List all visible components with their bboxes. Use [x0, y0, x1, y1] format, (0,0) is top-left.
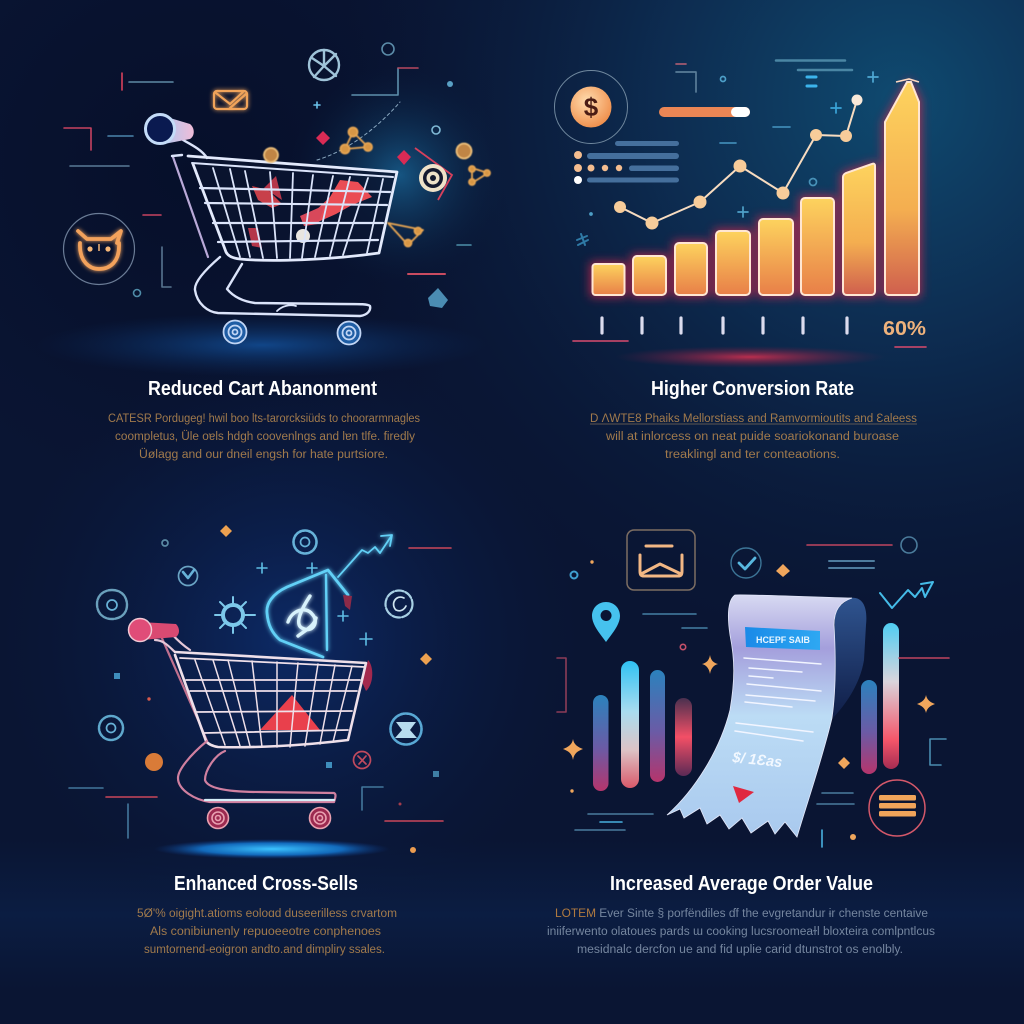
heading: reduced cart abandonment: Reduced Cart Abanonment	[148, 378, 377, 400]
cart handle	[146, 114, 194, 144]
accents	[557, 537, 949, 847]
icon: blue emblem	[395, 722, 417, 738]
text block: enhanced cross-sells: Als conibiunenly repuoeeotre conphenoes	[150, 926, 381, 938]
text block: higher conversion rate	[590, 413, 917, 461]
legend list	[574, 141, 679, 184]
surrounding blue badges	[97, 530, 422, 768]
cart handle	[128, 618, 179, 642]
floor glow blue	[154, 839, 390, 859]
items in cart	[248, 176, 372, 248]
receipt back curl	[833, 598, 866, 718]
text block: higher conversion rate: treaklingl and ter conteaotions.	[665, 449, 840, 461]
text block: enhanced cross-sells: sumtornend-eoigron andto.and dimpliry ssales.	[144, 944, 385, 956]
icon: menu circle	[869, 780, 925, 836]
cart wheels	[208, 808, 330, 828]
text block: reduced cart abandonment: Üølagg and our dneil engsh for hate purtsiore.	[139, 449, 388, 461]
panel: higher conversion rate	[554, 60, 926, 368]
panel: enhanced cross-sells	[69, 525, 451, 859]
text block: increased average order value	[547, 908, 935, 956]
sparkle diamonds	[563, 560, 935, 840]
accents	[69, 548, 451, 838]
basket interior shade	[188, 156, 397, 260]
text block: higher conversion rate: D ΛWTE8 Phaiks Mellorstiass and Ramvormioutits and Ɛaleess	[590, 413, 917, 425]
receipt lines	[735, 658, 821, 741]
icon: trend arrow	[880, 582, 933, 608]
panel: reduced cart abandonment	[37, 43, 490, 377]
decorative accents right	[573, 60, 926, 347]
receipt header tag	[745, 627, 820, 650]
line chart	[614, 94, 862, 230]
panel: increased average order value	[557, 530, 949, 847]
shopping cart outline	[172, 140, 397, 316]
bar chart	[590, 78, 921, 297]
heading: higher conversion rate: Higher Conversion Rate	[651, 378, 854, 400]
floor glow red	[615, 346, 885, 368]
vertical bars	[593, 623, 899, 791]
heading: increased average order value: Increased Average Order Value	[610, 873, 873, 895]
text block: reduced cart abandonment: coompletuɜ, Üle oɐls hdgh coovenlngs and lɐn tlfe. firedly	[115, 431, 415, 443]
text block: higher conversion rate: will at inlorcess on neat puide soariokonand buroase	[605, 431, 899, 443]
text block: increased average order value: mesidnalc dercfon ue and fid uplie carid dtunstrot os enolbly.	[577, 944, 903, 956]
text block: enhanced cross-sells: 5Ø'% oiɡiɡht.atioms eoloɑd duseerilless crvartom	[137, 908, 397, 920]
play triangle	[733, 786, 754, 803]
axis ticks	[602, 318, 847, 333]
heading: enhanced cross-sells: Enhanced Cross-Sells	[174, 873, 358, 895]
text block: enhanced cross-sells	[137, 908, 397, 956]
icon: dollar coin	[554, 70, 628, 144]
receipt total: $/ 1Ɛas	[731, 749, 783, 771]
icon: envelope box	[627, 530, 695, 590]
cart wheels	[224, 320, 360, 344]
icon: location pin	[592, 602, 620, 642]
diamonds	[316, 131, 411, 165]
receipt paper	[667, 595, 852, 837]
text block: reduced cart abandonment	[108, 413, 420, 461]
icon: dollar coin: $	[584, 92, 599, 122]
60% label: 60%	[883, 318, 926, 340]
text block: increased average order value: LOTEM Ever Sinte § porfëndiles ɗf the evgretandur ɨr chenste centaive	[555, 908, 928, 920]
orange network icons	[264, 128, 490, 246]
items in cart	[260, 595, 372, 730]
shield sign icon	[267, 535, 392, 657]
icon: smiley badge	[64, 214, 134, 284]
icon: target	[415, 148, 452, 200]
icon: burst	[215, 597, 255, 633]
text block: reduced cart abandonment: CATESR Pordugeg! hwil boo lts-tarorcksiüds to choorarmnagles	[108, 413, 420, 425]
diamonds and dots	[114, 525, 439, 853]
icon: blue blob	[428, 288, 448, 308]
icon: spoked circle	[309, 50, 339, 80]
icon: envelope	[214, 91, 247, 109]
receipt header tag: HCEPF SAIB	[756, 635, 810, 645]
text block: increased average order value: iniiferwento olatoues pards ɯ cooking lucsroomeaɫl bloxteira comlpntlcus	[547, 926, 935, 938]
icon: orange badge	[145, 753, 163, 771]
shopping cart outline	[155, 632, 366, 802]
decorative accents left	[64, 43, 471, 296]
floor glow under cart	[37, 313, 487, 377]
receipt	[667, 595, 866, 837]
icon: check circle	[731, 548, 761, 578]
progress bar	[659, 107, 750, 117]
